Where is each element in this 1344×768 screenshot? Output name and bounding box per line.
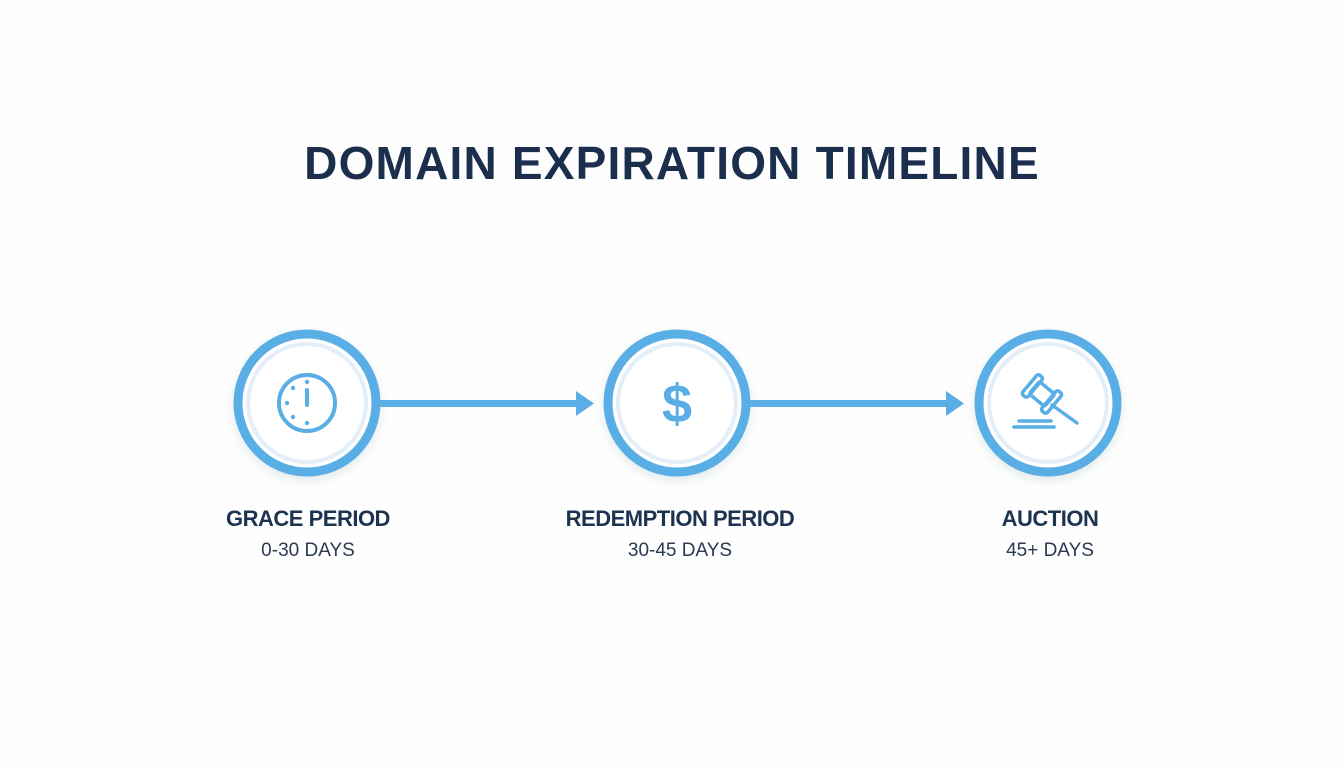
arrow 1 — [378, 391, 594, 416]
arrow 2 — [748, 391, 964, 416]
circle: redemption (dollar) — [608, 334, 746, 472]
label: grace period: GRACE PERIOD — [226, 506, 390, 531]
label: auction — [1002, 506, 1098, 561]
label: grace period — [226, 506, 390, 561]
label: auction: AUCTION — [1002, 506, 1098, 531]
circle: auction (gavel) — [979, 334, 1117, 472]
label: redemption period: REDEMPTION PERIOD — [566, 506, 794, 531]
circle: grace period (clock) — [238, 334, 376, 472]
title: DOMAIN EXPIRATION TIMELINE — [304, 137, 1040, 189]
label: auction: 45+ DAYS — [1006, 540, 1094, 561]
icon: clock — [279, 375, 335, 431]
icon: gavel — [1014, 374, 1077, 427]
label: redemption period — [566, 506, 794, 561]
label: grace period: 0-30 DAYS — [261, 540, 355, 561]
icon: dollar: $ — [662, 374, 692, 434]
label: redemption period: 30-45 DAYS — [628, 540, 732, 561]
